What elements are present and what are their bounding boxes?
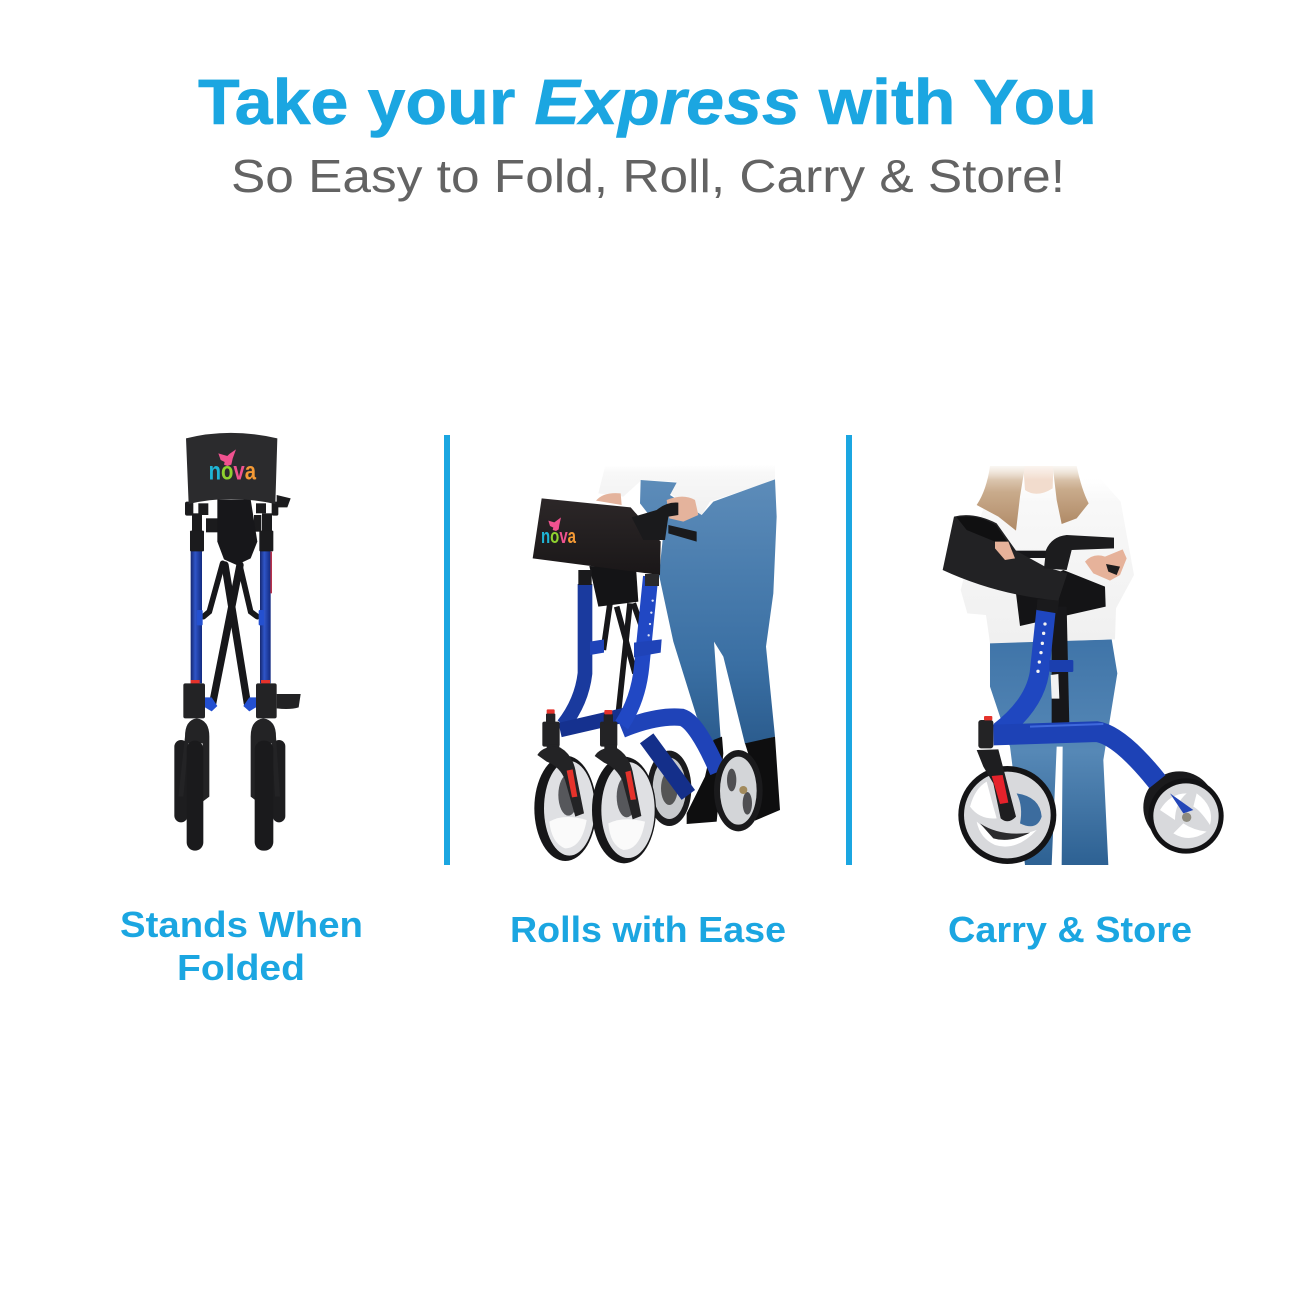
neck [1023, 466, 1053, 494]
front wheels [187, 741, 273, 851]
panel: carry and store photo [943, 460, 1224, 865]
nova logo [541, 517, 577, 548]
handle [632, 503, 697, 586]
scissor folding frame [203, 563, 257, 703]
caption: stands when folded: Stands When [120, 904, 363, 945]
nova logo: nova [541, 526, 577, 548]
panel: rolls with ease photo [533, 465, 780, 863]
boots [687, 737, 780, 824]
right rear wheel [714, 750, 763, 831]
seat back [943, 515, 1067, 601]
title: Take your Express with You [198, 66, 1097, 138]
lower side frame [622, 717, 718, 795]
top fade [973, 460, 1107, 480]
holes [647, 599, 654, 636]
front wheel left [534, 756, 596, 861]
cup holder [277, 694, 301, 709]
left hand [995, 542, 1015, 560]
folding frame [603, 603, 642, 713]
blue brackets [197, 610, 264, 711]
hands [596, 493, 698, 522]
blue frame upright [999, 611, 1046, 732]
divider [846, 435, 852, 865]
pouch [1016, 570, 1106, 626]
hubs and forks [178, 683, 280, 802]
divider [444, 435, 450, 865]
caption: carry and store: Carry & Store [948, 909, 1192, 950]
grip handle [1044, 535, 1114, 570]
caster [978, 716, 993, 748]
tube collar [1037, 599, 1059, 613]
white sweater [961, 478, 1134, 643]
nova logo: nova [209, 458, 256, 485]
rear tube [563, 584, 585, 725]
casters and forks [537, 713, 641, 819]
subtitle: So Easy to Fold, Roll, Carry & Store! [231, 150, 1065, 202]
adjustment holes [1036, 622, 1047, 673]
panel: stands when folded photo [174, 433, 301, 851]
caption: rolls with ease: Rolls with Ease [510, 909, 786, 950]
front wheel right [592, 757, 656, 863]
jeans [990, 639, 1117, 865]
upper collars and clamps [185, 495, 291, 551]
wrist strap [1106, 564, 1120, 575]
hair [977, 466, 1089, 531]
pouch [217, 499, 257, 565]
seat back [186, 433, 277, 504]
folding frame [1013, 551, 1069, 725]
front fork [977, 749, 1016, 821]
red strip [992, 775, 1008, 804]
rear wheel back [1143, 771, 1215, 843]
seat back [533, 498, 661, 575]
hand right [1085, 549, 1127, 581]
bracket and tag [1049, 660, 1073, 699]
rear wheel [1148, 778, 1224, 854]
seat inner [957, 517, 1013, 551]
jeans [640, 479, 777, 744]
blue lower frame [993, 732, 1157, 782]
red details [547, 709, 636, 800]
shirt [598, 465, 775, 515]
front wheel [958, 766, 1056, 864]
rear wheels [174, 740, 285, 822]
cross brace and pouch [560, 566, 638, 730]
caption: stands when folded [120, 904, 363, 988]
frame highlight [1030, 724, 1103, 727]
rear leg wheel [647, 751, 691, 826]
red caps [191, 680, 270, 684]
blue bracket [590, 639, 662, 657]
blue tubes [191, 550, 272, 683]
front tube [622, 577, 651, 725]
caption: stands when folded: Folded [177, 947, 305, 988]
